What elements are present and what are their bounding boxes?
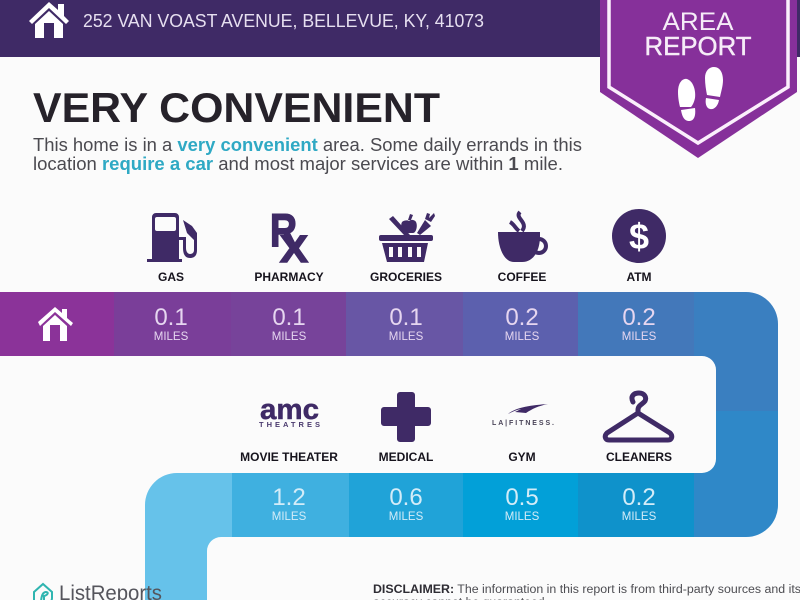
badge title: REPORT [644,31,752,61]
icon: AMC logo: THEATRES [259,420,320,429]
distance: 0.2 [505,304,539,331]
route ribbon [0,292,778,600]
description: This home is in a very convenient area. Some daily errands in this [33,135,582,155]
icon: Rx [270,204,309,271]
label: PHARMACY [254,270,324,284]
unit: MILES [154,331,189,343]
badge title: AREA [662,8,734,36]
stop: atm [612,209,666,343]
icon: logo house [34,584,52,600]
icon: gas pump [147,213,197,262]
icon: footprints [678,67,723,121]
label: GYM [508,450,536,464]
stop: groceries [370,213,442,343]
unit: MILES [389,331,424,343]
label: COFFEE [498,270,546,284]
title: VERY CONVENIENT [33,84,440,131]
stop: cleaners [605,393,672,523]
label: CLEANERS [606,450,672,464]
distance: 1.2 [272,484,306,511]
icon: AMC logo: amc [260,394,319,426]
icon: Rx: R [270,204,297,256]
stop: coffee [498,212,546,343]
stop: gas [147,213,197,343]
distance: 0.1 [154,304,188,331]
icon: hanger [605,393,672,440]
disclaimer: DISCLAIMER: The information in this report is from third-party sources and its [373,584,800,596]
distance: 0.1 [272,304,306,331]
icon: home [29,2,69,38]
unit: MILES [622,331,657,343]
icon: Rx: X [280,229,309,271]
label: GROCERIES [370,270,442,284]
icon: home on ribbon [38,307,73,341]
icon: dollar coin: $ [629,216,649,257]
label: GAS [158,270,184,284]
unit: MILES [505,511,540,523]
distance: 0.1 [389,304,423,331]
area report badge [600,0,797,158]
icon: LA Fitness logo: LA|FITNESS. [492,420,554,427]
stop: gym [492,404,554,523]
description: location require a car and most major services are within 1 mile. [33,154,563,174]
header bar [0,0,800,57]
badge title [644,8,752,61]
label: MEDICAL [379,450,433,464]
distance: 0.6 [389,484,423,511]
stop: movie theater [240,394,338,523]
unit: MILES [389,511,424,523]
distance: 0.2 [622,484,656,511]
label: ATM [626,270,652,284]
listreports logo [34,582,162,600]
unit: MILES [272,331,307,343]
unit: MILES [505,331,540,343]
address: 252 VAN VOAST AVENUE, BELLEVUE, KY, 41073 [83,11,484,31]
description [33,135,582,174]
unit: MILES [622,511,657,523]
unit: MILES [272,511,307,523]
stop: medical [379,392,433,523]
distance: 0.5 [505,484,539,511]
icon: coffee cup [498,212,546,262]
label: MOVIE THEATER [240,450,338,464]
stop: pharmacy [254,204,324,343]
icon: basket [379,213,435,262]
icon: cross [381,392,431,442]
distance: 0.2 [622,304,656,331]
